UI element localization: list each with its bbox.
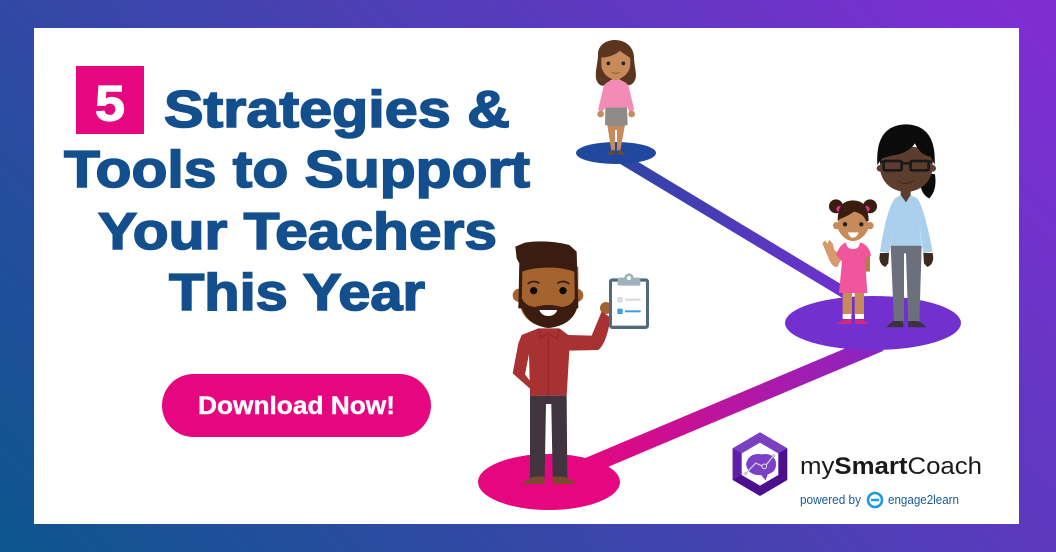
- node: blue: [576, 142, 656, 164]
- node: pink: [478, 454, 620, 510]
- powered by: powered by: [800, 493, 862, 507]
- title line 1: Strategies &: [164, 81, 510, 139]
- title line 3: Your Teachers: [98, 203, 497, 261]
- download button: Download Now!: [198, 392, 395, 420]
- character: girl in pink dress: [822, 199, 877, 324]
- number badge: 5: [95, 76, 125, 132]
- character: woman in pink: [596, 40, 636, 155]
- title line 2: Tools to Support: [64, 141, 530, 199]
- number badge: [76, 66, 144, 134]
- node: purple: [785, 296, 961, 350]
- title line 4: This Year: [169, 264, 425, 322]
- character: woman with glasses: [877, 124, 936, 327]
- download button: [162, 374, 431, 437]
- icon: hexagon brain: [733, 432, 787, 496]
- character: man with clipboard: [513, 241, 649, 484]
- path: pink to purple: [575, 343, 880, 472]
- wordmark: mySmartCoach: [800, 453, 982, 480]
- clipboard: [609, 273, 649, 329]
- icon: engage2learn: [868, 493, 882, 507]
- path: blue to purple: [616, 155, 850, 296]
- engage2learn: engage2learn: [888, 493, 959, 507]
- logo: mySmartCoach: [733, 432, 982, 507]
- title: [64, 66, 530, 322]
